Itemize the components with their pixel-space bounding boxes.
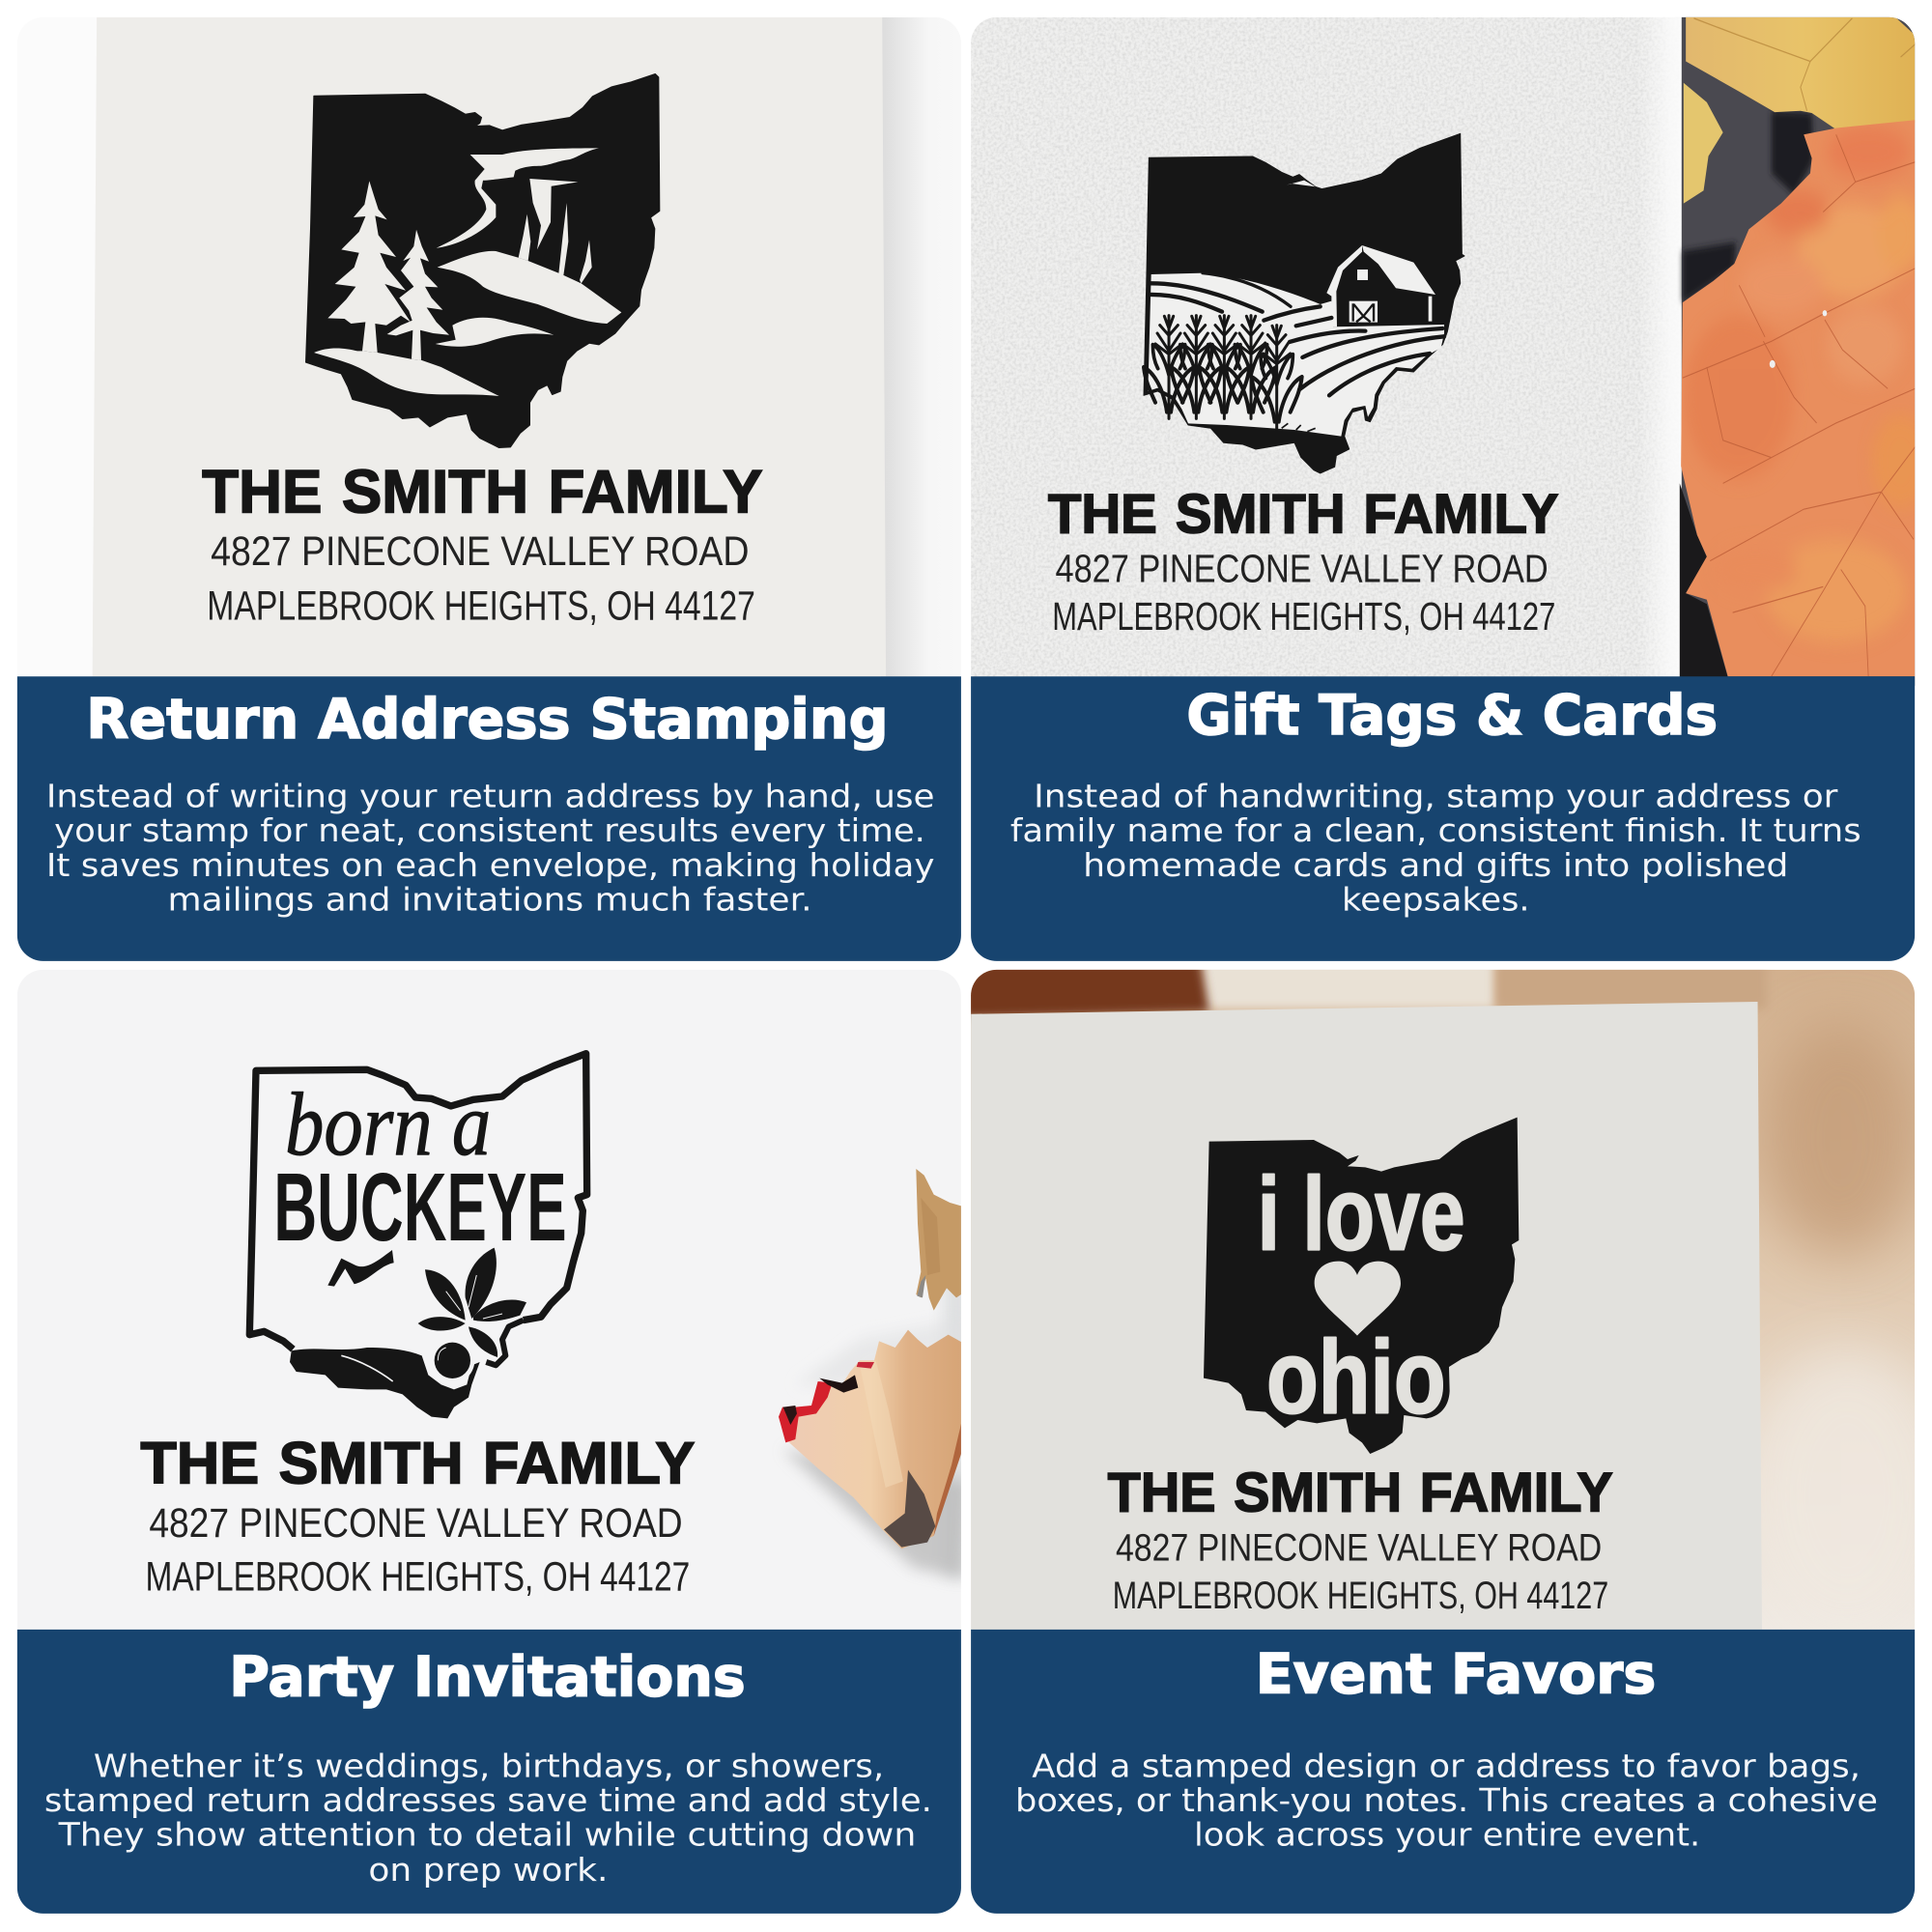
- pencil shavings: [779, 1169, 982, 1577]
- field furrows: [1151, 273, 1444, 395]
- body text: mailings and invitations much faster.: [167, 882, 812, 919]
- body text: on prep work.: [368, 1852, 608, 1889]
- stamp address text: MAPLEBROOK HEIGHTS, OH 44127: [1052, 594, 1555, 639]
- stamp address text: MAPLEBROOK HEIGHTS, OH 44127: [1113, 1574, 1608, 1617]
- photo: paper card on white: [93, 17, 945, 676]
- stamp address text: MAPLEBROOK HEIGHTS, OH 44127: [146, 1554, 690, 1601]
- photo: white paper with pencil shavings: [17, 970, 982, 1635]
- body text: They show attention to detail while cutting down: [57, 1817, 916, 1854]
- photo: paper card on blurred warm background: [960, 960, 1932, 1644]
- caption band: [971, 1630, 1915, 1914]
- stamp address text: [1108, 1462, 1613, 1617]
- body text: [1015, 1747, 1878, 1854]
- heading: Event Favors: [1256, 1642, 1656, 1707]
- stamp address text: THE SMITH FAMILY: [1108, 1462, 1613, 1523]
- icon: Ohio outline stamp "born a Buckeye": [249, 1054, 587, 1418]
- stamp address text: THE SMITH FAMILY: [140, 1431, 695, 1496]
- icon: Ohio stamp "i love ohio": ohio: [1266, 1320, 1446, 1435]
- stamp address text: [140, 1431, 695, 1601]
- heading: Gift Tags & Cards: [1186, 683, 1718, 748]
- corn stalks: [1144, 316, 1302, 428]
- autumn leaves photo: [1680, 14, 1930, 686]
- icon: Ohio stamp "i love ohio": [1204, 1118, 1519, 1454]
- panel: Event Favors: [960, 960, 1932, 1914]
- block lettering: BUCKEYE: [273, 1153, 567, 1262]
- body text: look across your entire event.: [1194, 1817, 1700, 1854]
- stamp address text: 4827 PINECONE VALLEY ROAD: [149, 1500, 683, 1547]
- heading: Party Invitations: [229, 1645, 746, 1710]
- body text: [1010, 778, 1861, 919]
- body text: family name for a clean, consistent finish. It turns: [1010, 812, 1861, 849]
- icon: Ohio stamp "i love ohio": i love: [1258, 1155, 1465, 1271]
- script lettering: born a: [285, 1075, 491, 1175]
- body text: boxes, or thank-you notes. This creates a cohesive: [1015, 1782, 1878, 1819]
- body text: Add a stamped design or address to favor bags,: [1032, 1747, 1861, 1784]
- heading: Return Address Stamping: [86, 687, 889, 752]
- body text: [44, 1747, 932, 1889]
- panel: Return Address Stamping: [17, 17, 961, 961]
- buckeye leaf and nut: [418, 1248, 526, 1383]
- barn: [1326, 245, 1435, 327]
- squiggle: [327, 1250, 394, 1287]
- body text: stamped return addresses save time and add style.: [44, 1782, 932, 1819]
- caption band: [971, 676, 1915, 961]
- stamp address text: MAPLEBROOK HEIGHTS, OH 44127: [207, 583, 755, 630]
- body text: Instead of writing your return address by hand, use: [46, 778, 934, 814]
- stamp address text: THE SMITH FAMILY: [202, 459, 763, 526]
- stamp address text: 4827 PINECONE VALLEY ROAD: [211, 528, 750, 575]
- field: [1148, 273, 1444, 437]
- panel: Gift Tags & Cards: [971, 14, 1930, 961]
- stamp address text: 4827 PINECONE VALLEY ROAD: [1055, 547, 1548, 591]
- stamp address text: 4827 PINECONE VALLEY ROAD: [1116, 1525, 1602, 1569]
- caption band: [17, 1630, 961, 1914]
- stamp address text: [202, 459, 763, 630]
- body text: your stamp for neat, consistent results every time.: [54, 812, 925, 849]
- icon: Ohio stamp with barn and cornfield: [1144, 133, 1464, 473]
- icon: Ohio stamp with pine trees and hills: [306, 74, 660, 447]
- stamp address text: THE SMITH FAMILY: [1048, 484, 1559, 546]
- body text: Whether it’s weddings, birthdays, or showers,: [94, 1747, 884, 1784]
- body text: homemade cards and gifts into polished: [1083, 847, 1788, 884]
- photo: textured paper with autumn leaves: [971, 14, 1930, 686]
- stamp address text: [1048, 484, 1559, 639]
- body text: It saves minutes on each envelope, making holiday: [46, 847, 934, 884]
- body text: Instead of handwriting, stamp your address or: [1034, 778, 1838, 814]
- body text: [46, 778, 934, 919]
- panel: Party Invitations: [17, 970, 982, 1914]
- caption band: [17, 676, 961, 961]
- body text: keepsakes.: [1342, 882, 1530, 919]
